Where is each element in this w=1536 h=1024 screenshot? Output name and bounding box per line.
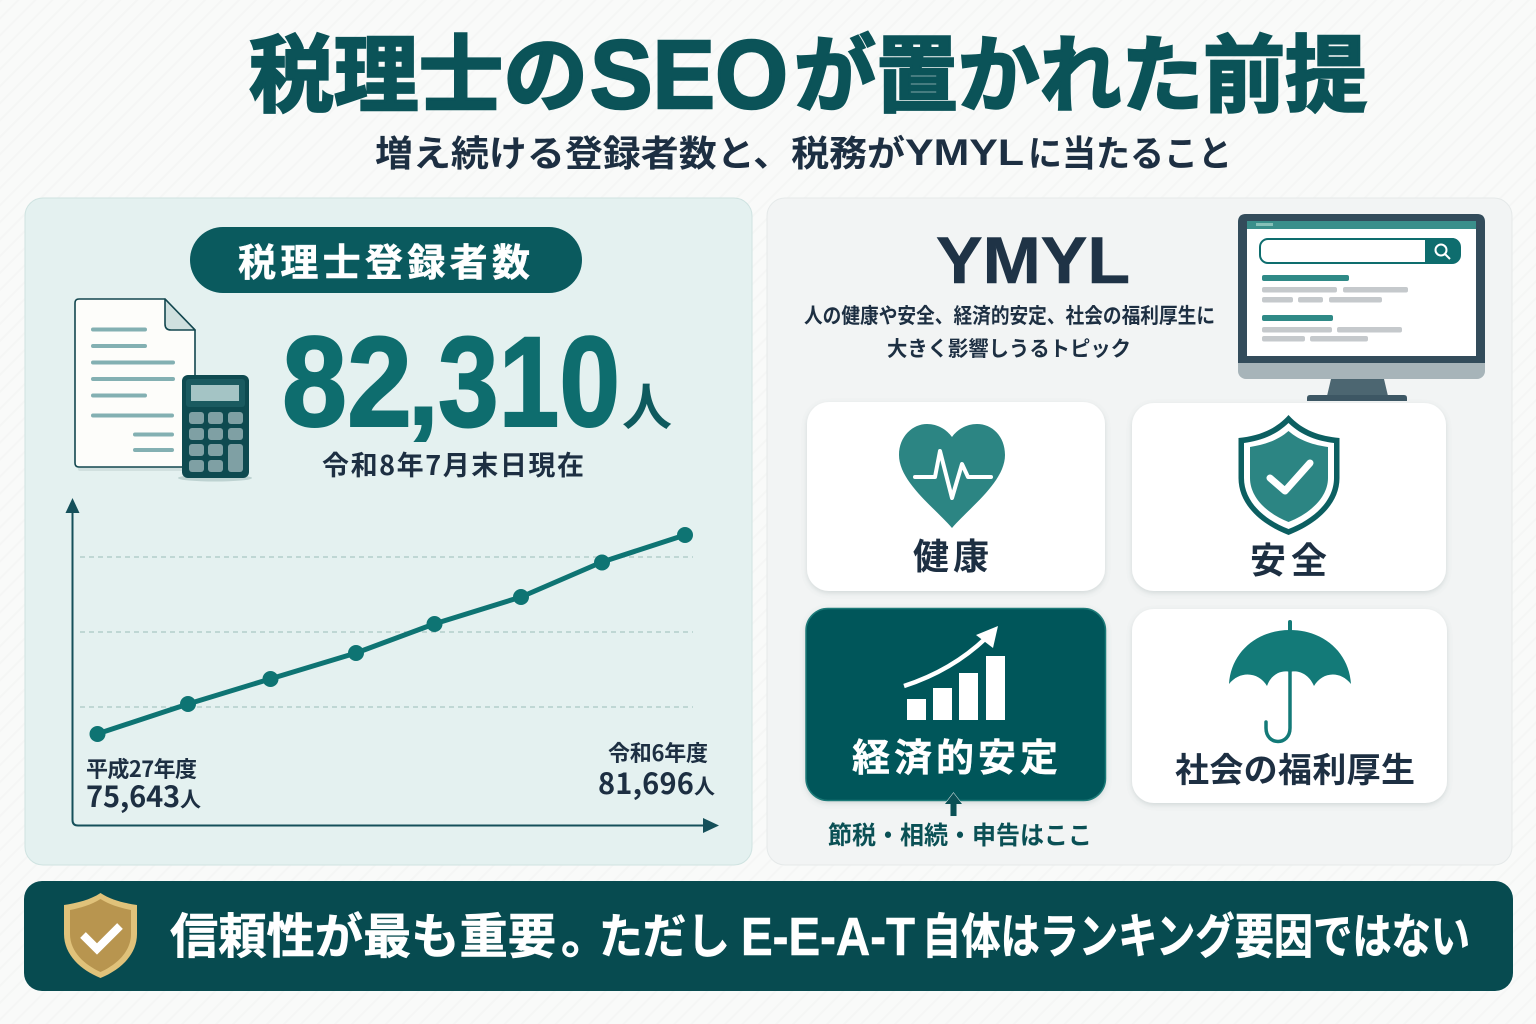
end label: 令和6年度 bbox=[608, 736, 708, 768]
subtitle: に当たること bbox=[1028, 133, 1232, 174]
banner message: E-E-A-T bbox=[741, 907, 915, 967]
icon: document bbox=[75, 299, 195, 471]
banner message: 。 bbox=[561, 911, 609, 964]
title: 税理士の bbox=[249, 29, 588, 123]
icon: gold shield bbox=[64, 893, 137, 978]
heading pill bbox=[190, 227, 582, 293]
icon: heart with pulse bbox=[899, 424, 1005, 528]
banner message bbox=[170, 907, 1470, 967]
end label bbox=[598, 736, 715, 803]
card: safety bbox=[1132, 403, 1446, 591]
heading pill: 税理士登録者数 bbox=[238, 243, 530, 285]
date note: 令和8年7月末日現在 bbox=[322, 444, 584, 483]
title: SEO bbox=[590, 20, 788, 129]
icon: umbrella bbox=[1229, 622, 1351, 742]
big number: 82 bbox=[282, 311, 412, 454]
banner message: 信頼性が最も重要 bbox=[170, 911, 556, 964]
icon: monitor with search results bbox=[1238, 214, 1485, 401]
title bbox=[249, 20, 1367, 129]
banner message: ただし bbox=[599, 911, 730, 964]
line chart bbox=[66, 498, 719, 833]
icon: shield with check bbox=[1238, 415, 1340, 535]
label: 経済的安定 bbox=[852, 738, 1058, 780]
panel: YMYL bbox=[767, 198, 1512, 865]
bottom banner bbox=[24, 881, 1513, 991]
note: tax topics: 節税・相続・申告はここ bbox=[828, 822, 1092, 850]
label: 安全 bbox=[1250, 540, 1327, 581]
label: 健康 bbox=[913, 536, 989, 577]
arrow to economic stability bbox=[945, 793, 962, 816]
chart line bbox=[90, 527, 693, 742]
title: が置かれた前提 bbox=[794, 29, 1367, 123]
icon: growth bars and arrow bbox=[904, 626, 1005, 720]
YMYL description bbox=[804, 305, 1215, 361]
icon: calculator bbox=[178, 375, 252, 482]
subtitle: YMYL bbox=[905, 132, 1024, 173]
subtitle bbox=[375, 132, 1232, 174]
end label: 81,696人 bbox=[598, 761, 715, 803]
label: 社会の福利厚生 bbox=[1175, 752, 1415, 790]
chart axes bbox=[66, 498, 719, 833]
start label: 平成27年度 bbox=[86, 752, 197, 784]
panel: registered tax accountants bbox=[25, 198, 752, 865]
subtitle: 増え続ける登録者数と、税務が bbox=[375, 133, 905, 174]
big number: 人 bbox=[622, 380, 672, 436]
card: health bbox=[807, 402, 1105, 591]
card: economic stability (highlighted) bbox=[806, 608, 1106, 800]
big number: 310 bbox=[438, 311, 620, 454]
start label: 75,643人 bbox=[86, 774, 201, 816]
big number bbox=[282, 311, 672, 454]
start label bbox=[86, 752, 201, 816]
YMYL heading: YMYL bbox=[936, 223, 1130, 297]
card: social welfare bbox=[1132, 609, 1447, 803]
YMYL description: 大きく影響しうるトピック bbox=[887, 338, 1131, 361]
big number: , bbox=[408, 325, 439, 448]
YMYL description: 人の健康や安全、経済的安定、社会の福利厚生に bbox=[804, 305, 1215, 328]
